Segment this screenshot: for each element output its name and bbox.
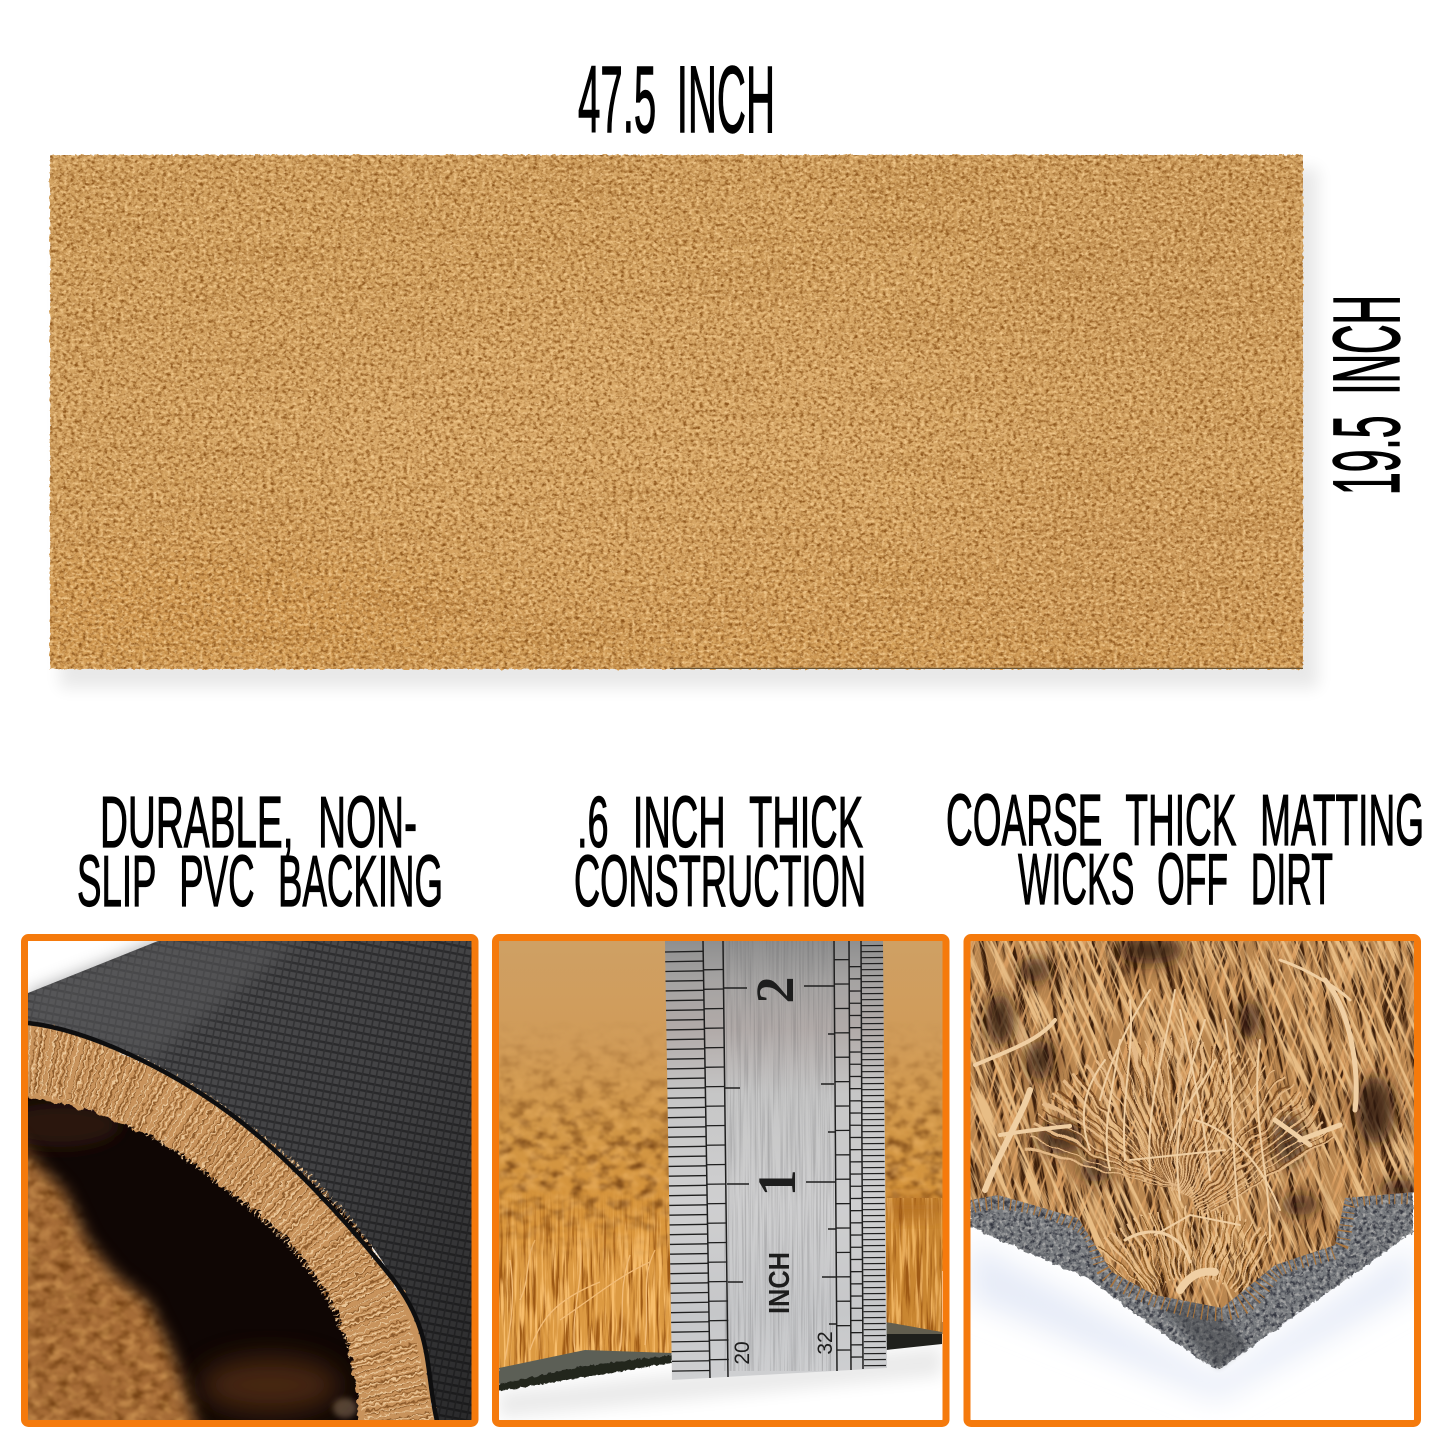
left pile fibres <box>499 1198 672 1368</box>
coir fibre mass <box>970 941 1414 1308</box>
rolled mat interior <box>28 1096 372 1420</box>
ruler numerals: 20 <box>731 1341 754 1365</box>
heading: durable backing: DURABLE, NON- <box>100 783 417 863</box>
bluish floor shadow <box>970 1240 1414 1400</box>
ruler numerals <box>731 976 837 1365</box>
heading: thickness: .6 INCH THICK <box>577 783 863 863</box>
rubber backing with weave texture <box>28 941 472 1421</box>
ruler numerals: 32 <box>814 1331 837 1355</box>
black backing edge <box>28 1023 437 1421</box>
coir fibre rim <box>24 1023 437 1425</box>
heading: coarse matting <box>946 781 1424 920</box>
infographic canvas: 47.5 INCH <box>578 47 775 153</box>
heading: durable backing: SLIP PVC BACKING <box>77 842 443 922</box>
orange frame: fibre panel <box>967 938 1418 1424</box>
mat drop shadow <box>60 168 1318 688</box>
panel: coarse fibre close-up <box>970 941 1414 1400</box>
orange frame: ruler panel <box>496 938 946 1424</box>
right gray latex base <box>886 1322 942 1350</box>
heading: thickness <box>574 783 866 922</box>
infographic canvas: 19.5 INCH <box>1314 295 1420 495</box>
panel: rolled PVC backing <box>0 941 472 1430</box>
panel: ruler thickness measurement <box>499 941 943 1421</box>
heading: durable backing <box>77 783 443 922</box>
blurred mat surface <box>499 941 943 1271</box>
main coir door mat <box>0 155 1320 669</box>
ruler numerals: INCH <box>764 1252 796 1314</box>
ruler numerals: 2 <box>745 976 805 1004</box>
floor shadow <box>499 1346 942 1418</box>
central fibre clump <box>1100 1115 1270 1275</box>
gray latex base <box>970 1192 1414 1370</box>
left gray latex base <box>499 1345 672 1391</box>
right pile fibres <box>886 1198 943 1338</box>
ruler numerals: 1 <box>747 1170 807 1196</box>
steel ruler <box>665 941 887 1380</box>
highlighted fibre strands <box>975 960 1356 1290</box>
fibre fringe over base <box>972 1191 1414 1308</box>
orange frame: backing panel <box>24 938 475 1424</box>
heading: thickness: CONSTRUCTION <box>574 842 866 922</box>
